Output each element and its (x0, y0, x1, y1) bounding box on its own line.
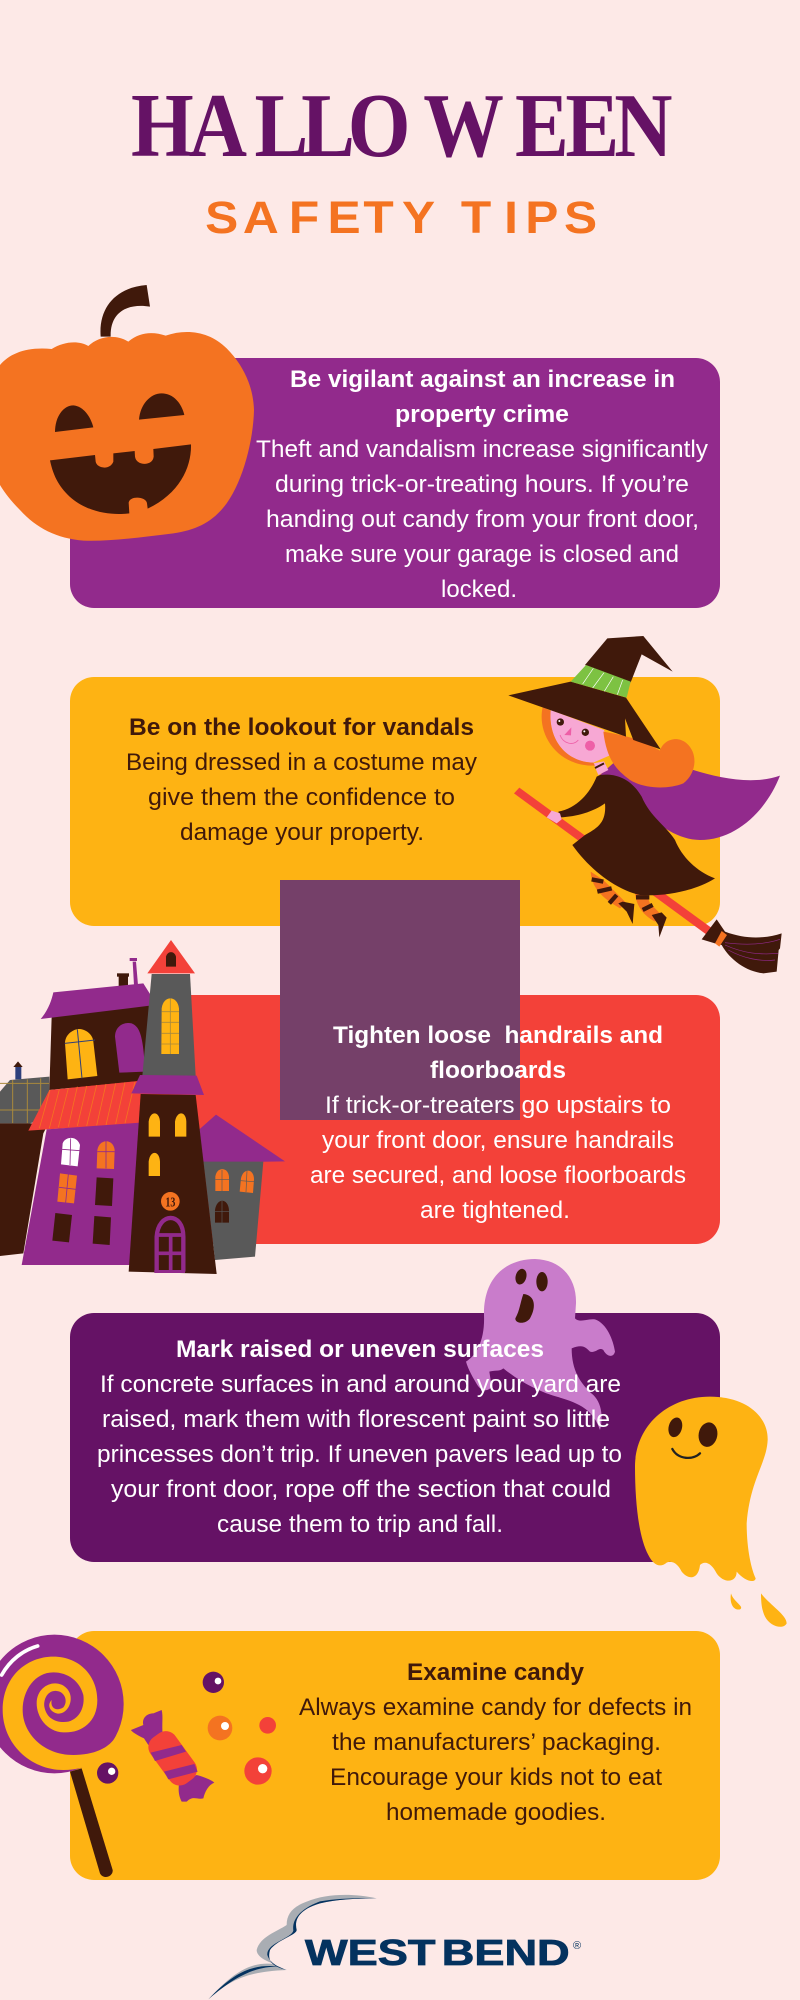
body text: If trick-or-treaters go upstairs to (325, 1092, 671, 1119)
panel: vandals background (70, 677, 720, 926)
body text: Being dressed in a costume may (126, 749, 477, 776)
body text (310, 1092, 686, 1224)
body text: during trick-or-treating hours. If you’re (275, 471, 689, 498)
body text: damage your property. (180, 819, 424, 846)
text block: uneven surfaces (97, 1336, 622, 1538)
body text (299, 1694, 692, 1826)
text block: property crime (256, 366, 708, 603)
heading: Mark raised or uneven surfaces (176, 1336, 544, 1363)
icon: wrapped candy and sweets (97, 1672, 276, 1802)
subtitle: SAFETY TIPS (205, 193, 597, 243)
body text (256, 436, 708, 603)
heading: Tighten loose handrails and (333, 1022, 663, 1049)
logo: West Bend (208, 1895, 581, 1999)
heading: Examine candy (407, 1659, 585, 1686)
icon: purple ghost (466, 1259, 615, 1430)
text block: vandals (126, 714, 477, 846)
text block: examine candy (299, 1659, 692, 1826)
icon: pumpkin (0, 285, 254, 541)
panel: uneven surfaces background (70, 1313, 720, 1562)
title: HALLOWEEN (131, 74, 672, 176)
body text: the manufacturers’ packaging. (332, 1729, 661, 1756)
overlay block (280, 880, 520, 1120)
body text: Always examine candy for defects in (299, 1694, 692, 1721)
body text: are secured, and loose floorboards (310, 1162, 686, 1189)
body text: locked. (441, 576, 517, 603)
body text: Theft and vandalism increase significantly (256, 436, 708, 463)
logo wordmark: WEST BEND (305, 1932, 570, 1973)
body text: princesses don’t trip. If uneven pavers lead up to (97, 1441, 622, 1468)
icon: lollipop (0, 1635, 124, 1877)
heading line 2: floorboards (430, 1057, 566, 1084)
body text: Encourage your kids not to eat (330, 1764, 662, 1791)
registered mark: ® (573, 1940, 581, 1952)
panel: handrails background (70, 995, 720, 1244)
heading: Be on the lookout for vandals (129, 714, 474, 741)
icon: haunted house (0, 940, 285, 1274)
body text: homemade goodies. (386, 1799, 606, 1826)
heading: Be vigilant against an increase in (290, 366, 675, 393)
body text: cause them to trip and fall. (217, 1511, 503, 1538)
body text: raised, mark them with florescent paint so little (102, 1406, 610, 1433)
body text: your front door, ensure handrails (322, 1127, 674, 1154)
body text: If concrete surfaces in and around your yard are (100, 1371, 621, 1398)
body text: are tightened. (420, 1197, 570, 1224)
body text (97, 1371, 622, 1538)
icon: yellow ghost (635, 1397, 787, 1627)
logo swoosh (208, 1895, 377, 1999)
panel: examine candy background (70, 1631, 720, 1880)
text block: handrails (310, 1022, 686, 1224)
heading line 2: property crime (395, 401, 569, 428)
body text (126, 749, 477, 846)
house number: 13 (165, 1196, 175, 1211)
body text: give them the confidence to (148, 784, 455, 811)
body text: handing out candy from your front door, (266, 506, 699, 533)
icon: witch on broom (508, 636, 782, 973)
body text: your front door, rope off the section that could (111, 1476, 611, 1503)
panel: property crime background (70, 358, 720, 608)
body text: make sure your garage is closed and (285, 541, 679, 568)
